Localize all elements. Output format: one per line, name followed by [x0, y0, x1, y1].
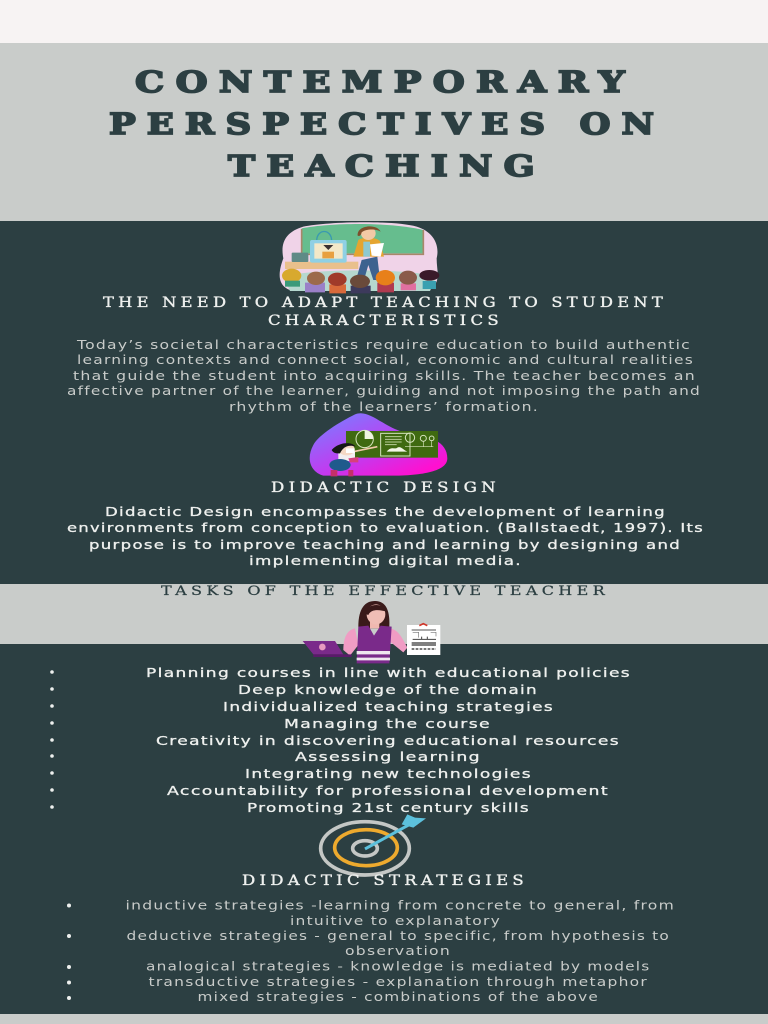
- text block: need to adapt: Today’s societal characteristics require education to build authentic: [76, 337, 691, 352]
- list: tasks of the effective teacher: [50, 665, 631, 815]
- heading: need to adapt: [103, 295, 667, 329]
- list: didactic strategies: analogical strategies - knowledge is mediated by models: [146, 958, 650, 974]
- list: didactic strategies: mixed strategies - combinations of the above: [198, 989, 599, 1004]
- title: CONTEMPORARY: [135, 65, 636, 99]
- list: didactic strategies: inductive strategies -learning from concrete to general, from: [126, 898, 675, 912]
- text block: need to adapt: learning contexts and connect social, economic and cultural realities: [77, 352, 694, 367]
- heading: didactic design: DIDACTIC DESIGN: [271, 480, 500, 496]
- title: [109, 65, 665, 183]
- list: tasks of the effective teacher: Assessing learning: [295, 749, 481, 764]
- icon: classroom illustration: [280, 222, 439, 293]
- title: PERSPECTIVES ON: [109, 107, 665, 141]
- bullets: strategies: [67, 904, 71, 1000]
- text block: need to adapt: that guide the student into acquiring skills. The teacher becomes an: [73, 368, 696, 383]
- list: tasks of the effective teacher: Individualized teaching strategies: [223, 699, 554, 714]
- text block: didactic design: purpose is to improve teaching and learning by designing and: [89, 537, 681, 552]
- list: tasks of the effective teacher: Promoting 21st century skills: [247, 800, 530, 815]
- list: didactic strategies: transductive strategies - explanation through metaphor: [148, 974, 648, 989]
- text block: didactic design: [67, 504, 704, 568]
- list: tasks of the effective teacher: Integrating new technologies: [245, 766, 532, 781]
- list: didactic strategies: [67, 898, 675, 1004]
- heading: need to adapt: CHARACTERISTICS: [268, 313, 503, 329]
- text block: didactic design: Didactic Design encompasses the development of learning: [105, 504, 666, 519]
- list: tasks of the effective teacher: Managing the course: [284, 716, 491, 731]
- heading: didactic strategies: DIDACTIC STRATEGIES: [242, 873, 528, 889]
- icon: target with arrow: [321, 814, 426, 875]
- text block: need to adapt: [67, 337, 701, 414]
- list: didactic strategies: deductive strategies - general to specific, from hypothesis to: [126, 928, 670, 943]
- icon: teacher at digital board: [310, 413, 447, 476]
- list: tasks of the effective teacher: Accountability for professional development: [167, 783, 609, 798]
- heading: need to adapt: THE NEED TO ADAPT TEACHING TO STUDENT: [103, 295, 667, 311]
- text block: need to adapt: rhythm of the learners’ formation.: [229, 399, 539, 414]
- text block: need to adapt: affective partner of the learner, guiding and not imposing the path and: [67, 383, 701, 398]
- list: tasks of the effective teacher: Planning courses in line with educational policies: [146, 665, 631, 680]
- list: tasks of the effective teacher: Deep knowledge of the domain: [238, 682, 538, 697]
- bullets: tasks: [50, 670, 54, 809]
- heading: tasks of the effective teacher: TASKS OF THE EFFECTIVE TEACHER: [161, 584, 609, 599]
- list: didactic strategies: observation: [345, 943, 451, 958]
- text block: didactic design: environments from conception to evaluation. (Ballstaedt, 1997). Its: [67, 520, 704, 535]
- title: TEACHING: [228, 149, 546, 183]
- icon: teacher with laptop and chart: [303, 601, 440, 663]
- list: didactic strategies: intuitive to explanatory: [290, 913, 501, 928]
- list: tasks of the effective teacher: Creativity in discovering educational resources: [156, 733, 620, 748]
- text block: didactic design: implementing digital media.: [249, 553, 522, 568]
